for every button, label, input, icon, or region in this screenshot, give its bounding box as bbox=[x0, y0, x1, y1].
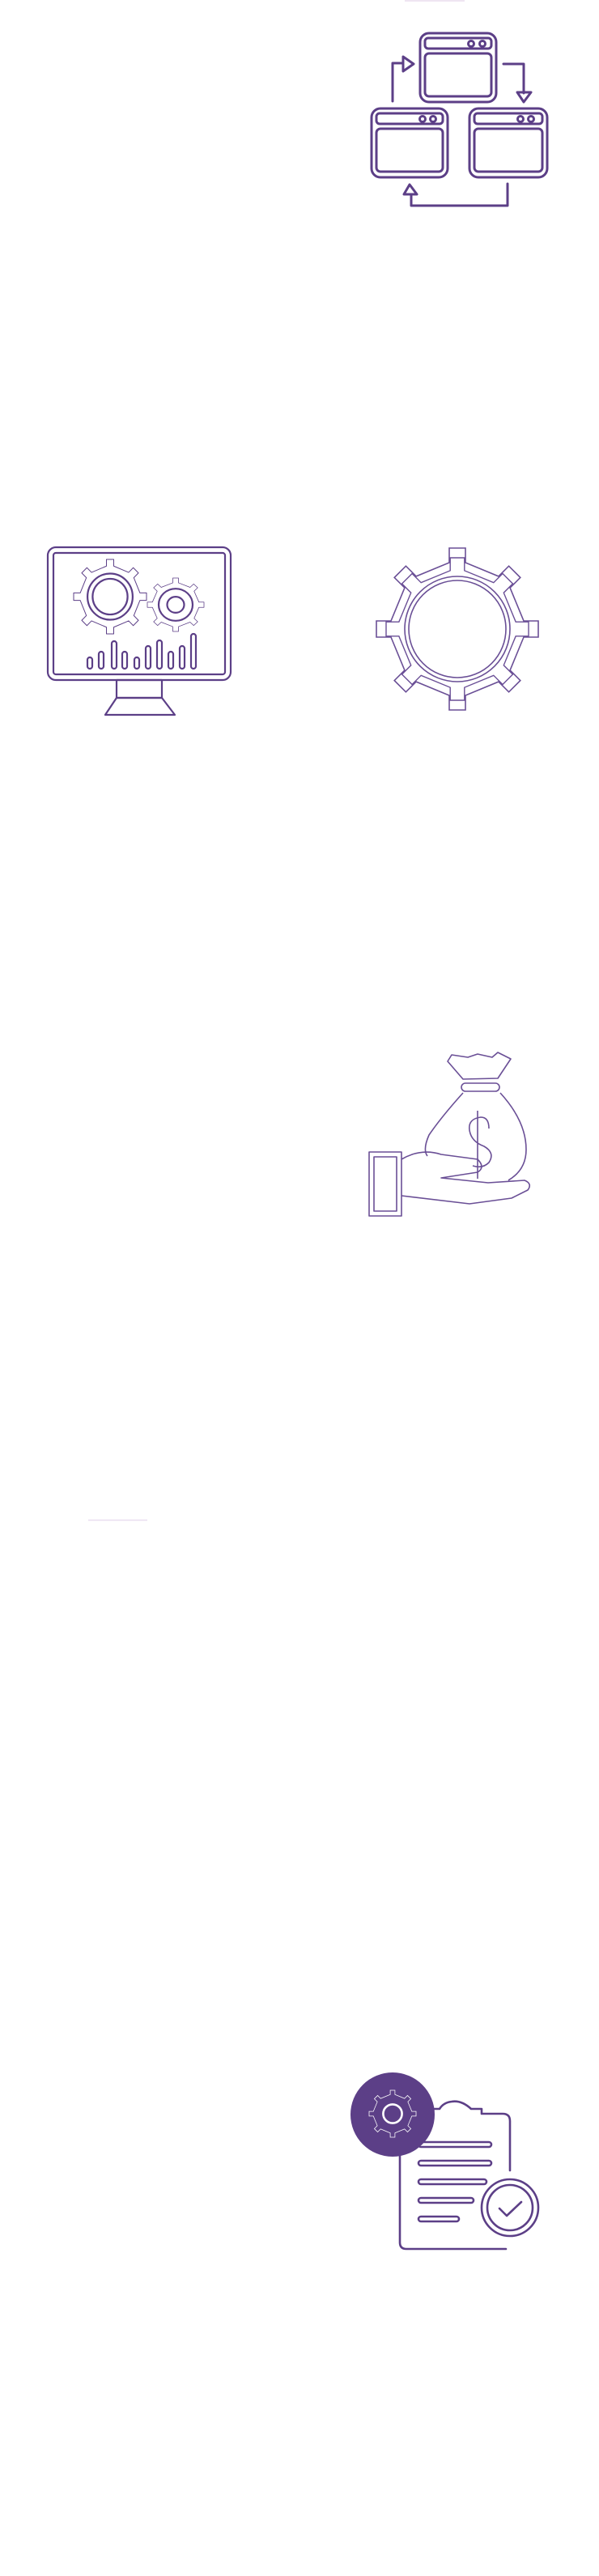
icon: hand with money bag bbox=[369, 1052, 529, 1216]
decorative top bar bbox=[405, 0, 465, 2]
icon: clipboard with gear and check bbox=[350, 2072, 538, 2249]
icon: large gear bbox=[376, 548, 538, 710]
icon: workflow windows bbox=[372, 33, 547, 206]
icon: monitor with gears bbox=[48, 547, 231, 715]
